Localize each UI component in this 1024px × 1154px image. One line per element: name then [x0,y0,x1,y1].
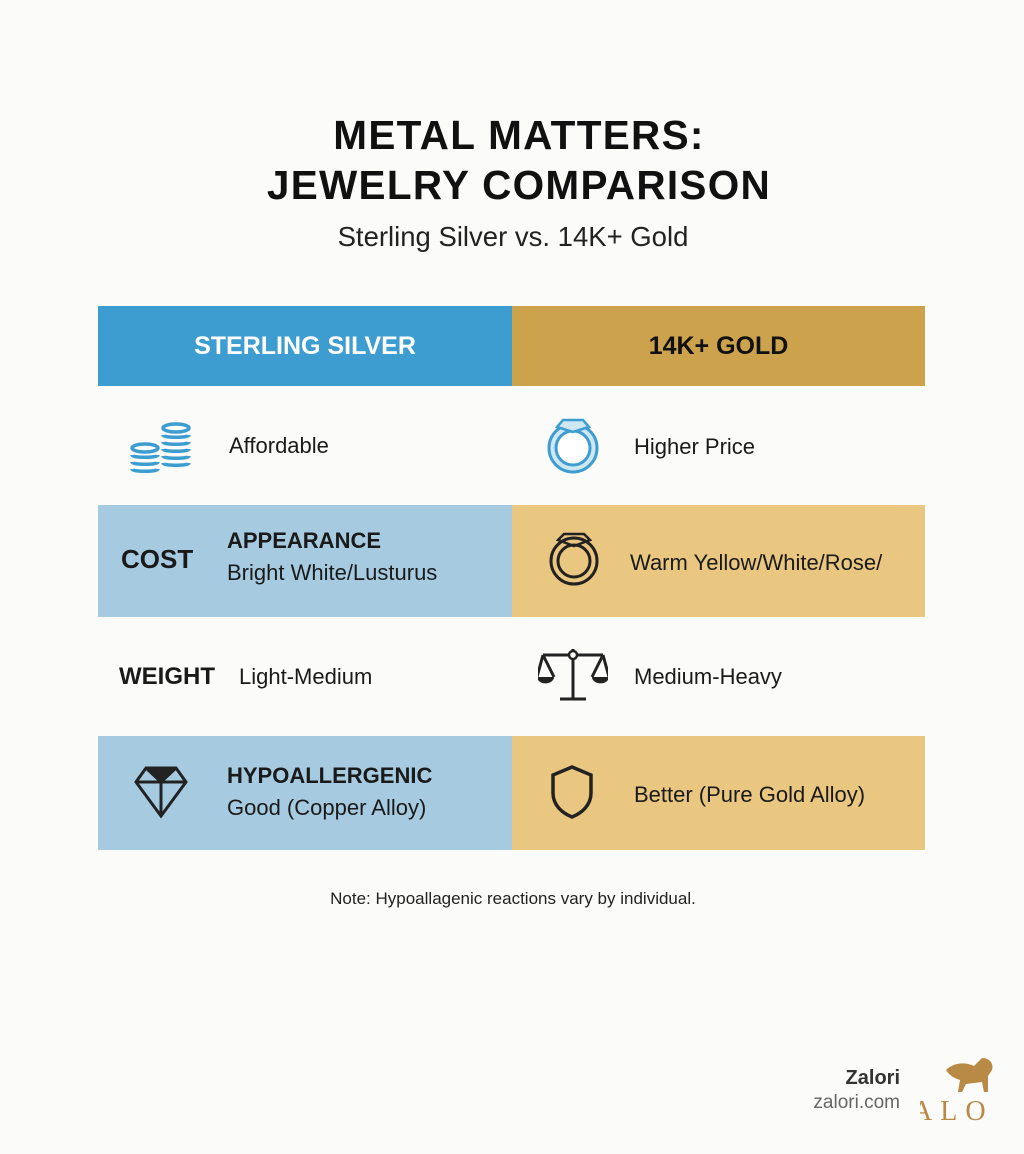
logo: lion [920,1058,994,1127]
label: hypoallergenic: Good (Copper Alloy) [227,795,426,820]
note: Note: Hypoallagenic reactions vary by individual. [330,889,696,908]
title: METAL MATTERS: [333,112,705,158]
text: light-medium: Light-Medium [239,664,372,689]
label: hypoallergenic [227,763,432,820]
label: appearance: APPEARANCE [227,528,381,553]
icon: ring outline [550,532,598,586]
header: gold [512,306,925,386]
label: appearance: Bright White/Lusturus [227,560,437,585]
text: better: Better (Pure Gold Alloy) [634,782,865,807]
subtitle: Sterling Silver vs. 14K+ Gold [338,221,688,252]
icon: coins [130,422,191,473]
title: JEWELRY COMPARISON [267,162,771,208]
row backgrounds [98,505,512,617]
brand text [813,1067,900,1113]
brand text: Zalori [846,1067,900,1089]
text: affordable: Affordable [229,433,329,458]
header: gold: 14K+ GOLD [649,332,788,360]
icon: ring blue [548,418,598,474]
label: cost: COST [121,544,193,574]
text: medium-heavy: Medium-Heavy [634,664,782,689]
icon: diamond [134,766,188,818]
icon: shield [551,765,593,819]
label: hypoallergenic: HYPOALLERGENIC [227,763,432,788]
text: warm yellow: Warm Yellow/White/Rose/ [630,550,882,575]
brand text: zalori.com [813,1092,900,1113]
label: weight: WEIGHT [119,663,215,690]
header: sterling silver: STERLING SILVER [194,332,416,360]
header: sterling silver [98,306,512,386]
title [267,112,771,208]
icon: scale [538,649,608,700]
label: appearance [227,528,437,585]
text: higher price: Higher Price [634,434,755,459]
